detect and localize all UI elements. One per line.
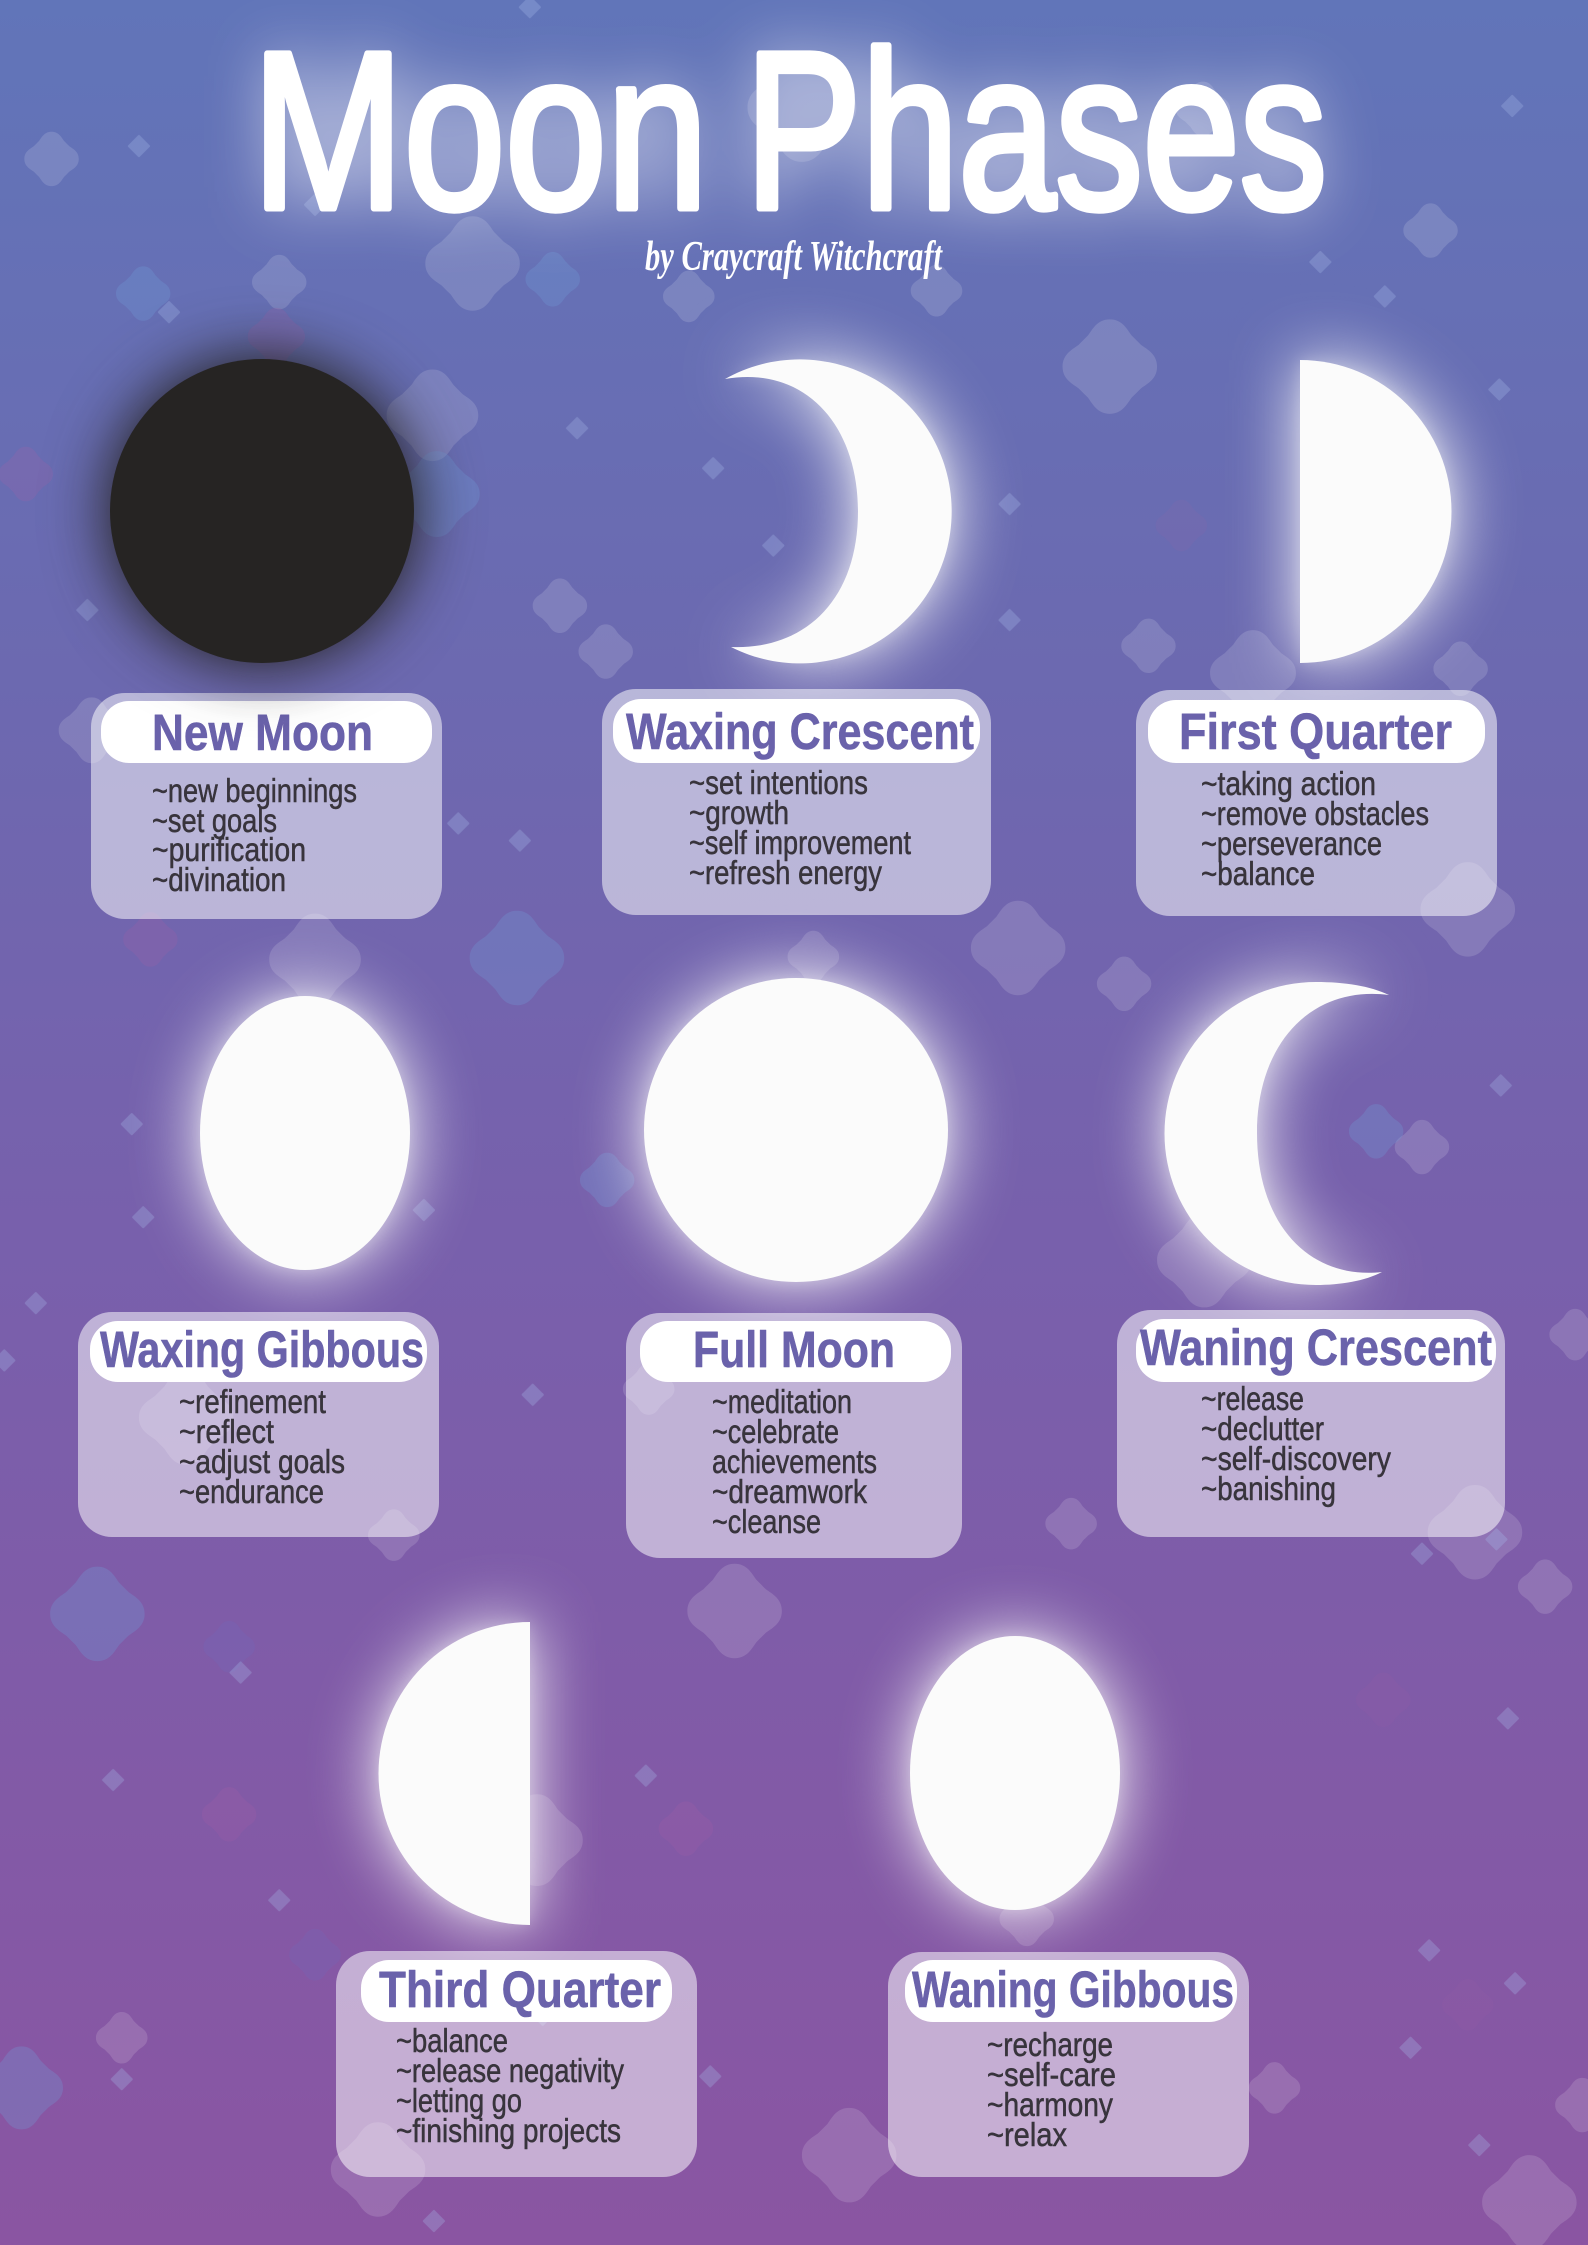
- panel background: [888, 1952, 1249, 2177]
- panel: Waning Gibbous: [888, 1952, 1249, 2177]
- list: Full Moon: achievements: [712, 1443, 877, 1480]
- list: Waning Gibbous: ~self-care: [987, 2056, 1116, 2093]
- heading: Third Quarter: Third Quarter: [379, 1961, 661, 2018]
- moon: Full Moon: [644, 978, 948, 1282]
- panel: Waning Crescent: [1117, 1310, 1505, 1537]
- list: Waxing Gibbous: [179, 1383, 345, 1510]
- list: Full Moon: ~meditation: [712, 1383, 852, 1420]
- panel background: [1136, 690, 1497, 916]
- list: Third Quarter: ~letting go: [396, 2082, 522, 2119]
- panel background: [91, 693, 442, 919]
- panel: New Moon: [91, 693, 442, 919]
- list: Waxing Crescent: ~set intentions: [689, 764, 868, 801]
- heading: First Quarter: First Quarter: [1179, 703, 1452, 760]
- list: Waxing Gibbous: ~adjust goals: [179, 1443, 345, 1480]
- heading: New Moon: New Moon: [152, 704, 373, 761]
- list: First Quarter: ~remove obstacles: [1201, 795, 1429, 832]
- list: First Quarter: ~taking action: [1201, 765, 1376, 802]
- list: Waning Crescent: ~banishing: [1201, 1470, 1336, 1507]
- moon: Waning Crescent: [1165, 982, 1389, 1285]
- list: New Moon: ~purification: [152, 831, 306, 868]
- list: First Quarter: [1201, 765, 1429, 892]
- list: Third Quarter: ~release negativity: [396, 2052, 624, 2089]
- list: Waning Crescent: ~declutter: [1201, 1410, 1324, 1447]
- list: Third Quarter: [396, 2022, 624, 2149]
- moon: Third Quarter: [378, 1622, 530, 1925]
- list: Waning Gibbous: ~relax: [987, 2116, 1067, 2153]
- panel background: [78, 1312, 439, 1537]
- panel: Waxing Gibbous: [78, 1312, 439, 1537]
- heading: Full Moon: Full Moon: [693, 1321, 895, 1378]
- heading: Waning Gibbous: Waning Gibbous: [912, 1961, 1234, 2018]
- moon: Waxing Gibbous: [200, 996, 410, 1270]
- moon: New Moon: [110, 359, 414, 663]
- list: New Moon: ~new beginnings: [152, 772, 357, 809]
- panel background: [602, 689, 991, 915]
- list: Third Quarter: ~balance: [396, 2022, 508, 2059]
- heading: Waning Crescent: Waning Crescent: [1140, 1319, 1492, 1376]
- panel: Full Moon: [626, 1313, 962, 1558]
- subtitle: by Craycraft Witchcraft: [645, 234, 943, 280]
- panel: Waxing Crescent: [602, 689, 991, 915]
- list: Full Moon: ~dreamwork: [712, 1473, 867, 1510]
- list: Waxing Gibbous: ~reflect: [179, 1413, 274, 1450]
- list: Waning Gibbous: ~recharge: [987, 2026, 1113, 2063]
- list: First Quarter: ~balance: [1201, 855, 1315, 892]
- list: Waxing Crescent: ~self improvement: [689, 824, 911, 861]
- heading: Waxing Crescent: Waxing Crescent: [626, 703, 974, 760]
- title: Phases: [745, 6, 1327, 256]
- moon: First Quarter: [1300, 360, 1452, 663]
- list: Waning Gibbous: ~harmony: [987, 2086, 1113, 2123]
- list: Full Moon: ~cleanse: [712, 1503, 821, 1540]
- list: Waxing Crescent: ~refresh energy: [689, 854, 882, 891]
- list: Waxing Crescent: ~growth: [689, 794, 789, 831]
- title: [252, 6, 1327, 256]
- panel background: [336, 1951, 697, 2177]
- list: Waning Crescent: ~release: [1201, 1380, 1304, 1417]
- list: First Quarter: ~perseverance: [1201, 825, 1382, 862]
- list: Waning Crescent: [1201, 1380, 1391, 1507]
- title: Moon: [252, 6, 708, 256]
- heading: Waxing Gibbous: Waxing Gibbous: [100, 1321, 424, 1378]
- list: New Moon: [152, 772, 357, 898]
- moon: Waning Gibbous: [910, 1636, 1120, 1910]
- list: New Moon: ~set goals: [152, 802, 277, 839]
- list: New Moon: ~divination: [152, 861, 286, 898]
- moon: Waxing Crescent: [725, 359, 952, 663]
- list: Waxing Crescent: [689, 764, 911, 891]
- list: Full Moon: [712, 1383, 877, 1540]
- list: Full Moon: ~celebrate: [712, 1413, 839, 1450]
- list: Waxing Gibbous: ~endurance: [179, 1473, 324, 1510]
- list: Third Quarter: ~finishing projects: [396, 2112, 621, 2149]
- panel: Third Quarter: [336, 1951, 697, 2177]
- panel background: [1117, 1310, 1505, 1537]
- panel: First Quarter: [1136, 690, 1497, 916]
- panel background: [626, 1313, 962, 1558]
- list: Waxing Gibbous: ~refinement: [179, 1383, 326, 1420]
- list: Waning Crescent: ~self-discovery: [1201, 1440, 1391, 1477]
- list: Waning Gibbous: [987, 2026, 1116, 2153]
